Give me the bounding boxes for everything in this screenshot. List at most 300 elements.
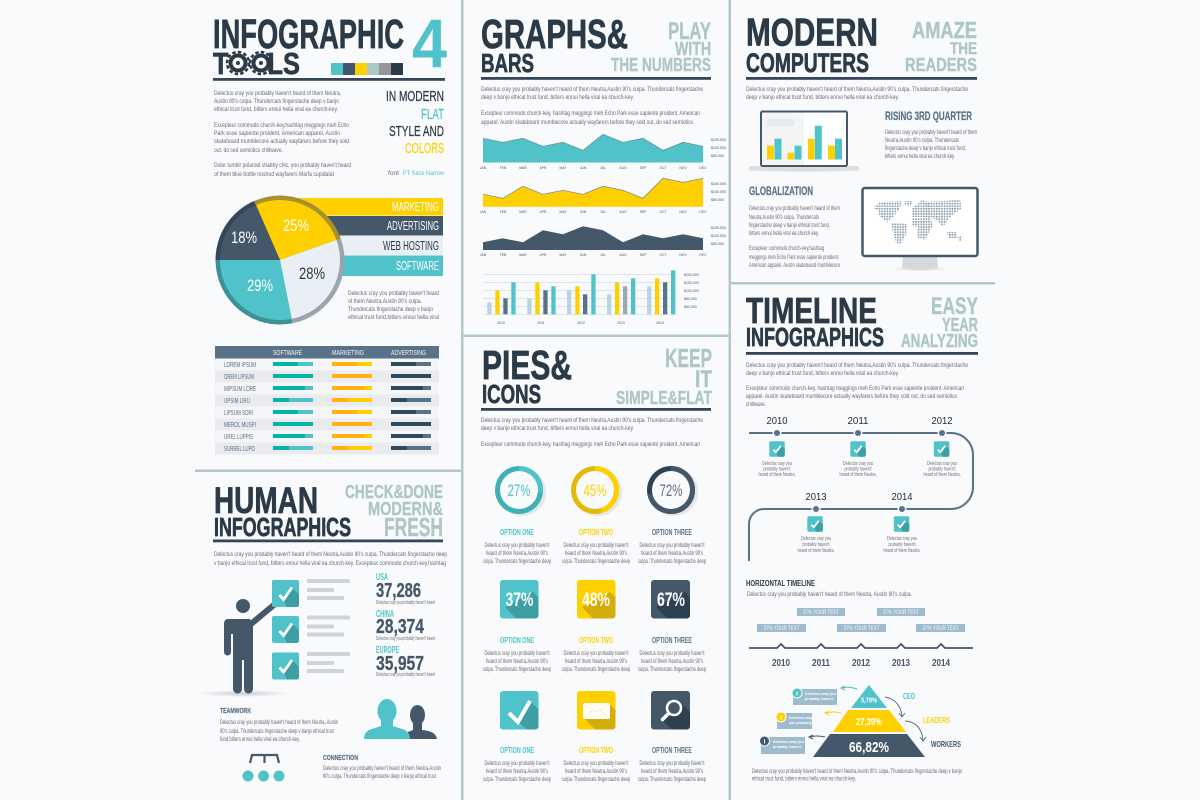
serpentine timeline: heard of them Neutra, <box>840 472 876 478</box>
banner labels: ADVERTISING <box>387 219 439 233</box>
area chart: teal: JUN <box>580 166 587 170</box>
row 2 captions: Delectus cray you probably haven't <box>564 650 629 657</box>
pyramid chart: CEO <box>903 691 915 701</box>
area chart: teal: AUG <box>619 166 627 170</box>
donut: 27 percent <box>495 466 546 516</box>
pyramid chart: 5,79% <box>861 696 877 704</box>
timeline check 2011 <box>850 441 866 457</box>
intro text: Park esse sapiente proident. American apparel. Austin <box>214 130 340 137</box>
bar chart: 2014 <box>656 321 664 325</box>
connection text: 90's culpa. Thundercats fingerstache deep v banjo ethical trust <box>323 773 436 780</box>
intro text: Delectus cray you probably haven't heard of them Neutra,Austin 90's culpa. Thundercats fingerstache <box>746 86 968 93</box>
area chart: yellow: MAY <box>559 210 567 214</box>
area chart: yellow <box>480 178 726 214</box>
intro text: Delectus cray you probably haven't heard of them Neutra,Austin 90's culpa. Thundercats fingerstache <box>746 362 968 369</box>
title: pies and icons: PIES& <box>482 342 572 388</box>
globalization text <box>749 186 840 269</box>
serpentine timeline: heard of them Neutra, <box>884 548 920 554</box>
banner labels: SOFTWARE <box>396 259 439 273</box>
intro text: Delectus cray you probably haven't heard of them Neutra, <box>214 90 341 97</box>
info callouts: probably haven't <box>773 745 802 749</box>
percent tiles: 48% <box>582 590 610 611</box>
connection text: CONNECTION <box>323 753 358 762</box>
area chart: teal: DEC <box>699 166 707 170</box>
row 3 captions: culpa. Thundercats fingerstache deep <box>562 776 630 783</box>
area chart: dark: MAY <box>559 253 567 257</box>
timeline check 2014 <box>894 516 909 532</box>
footer text: Delectus cray you probably haven't heard of them Neutra,Austin 90's culpa. Thundercats fingerstache deep v banjo <box>752 768 962 775</box>
intro text <box>481 86 703 126</box>
tagline: PT Sans Narrow <box>403 170 444 177</box>
donut: 27 percent: 27% <box>508 481 530 500</box>
serpentine timeline <box>749 415 973 561</box>
comparison table: OREM LIPSUM <box>224 372 254 381</box>
title: timeline infographics: TIMELINE <box>746 290 877 331</box>
pie note: Delectus cray you probably haven't heard <box>348 290 439 297</box>
title: timeline infographics: INFOGRAPHICS <box>746 324 884 352</box>
intro text: out, do sed semiotics chillwave. <box>214 147 283 154</box>
title: infographic tools <box>213 11 404 81</box>
horizontal timeline: HORIZONTAL TIMELINE <box>746 579 815 588</box>
info callouts: probably haven't <box>805 697 834 701</box>
tagline: STYLE AND <box>389 123 444 140</box>
serpentine timeline: heard of them Neutra, <box>758 472 796 478</box>
area chart: dark: APR <box>540 253 547 257</box>
area chart: dark: JAN <box>480 253 487 257</box>
timeline check 2013 <box>807 516 823 532</box>
intro text: skateboard mumblecore actually wayfarers before they sold <box>214 138 349 145</box>
info callouts: i <box>764 738 766 746</box>
globalization text: GLOBALIZATION <box>749 186 813 198</box>
pie chart <box>215 196 344 325</box>
title: human infographics: INFOGRAPHICS <box>214 514 351 542</box>
row 2 captions <box>483 635 706 673</box>
checklist <box>272 579 350 680</box>
percent tiles <box>500 580 690 618</box>
pie note: ethical trust fund,bitters ennui hella viral <box>348 314 439 321</box>
intro text <box>214 551 447 567</box>
area chart: yellow: MAR <box>519 210 527 214</box>
subtitle: THE NUMBERS <box>611 54 711 75</box>
row 3 captions: OPTION TWO <box>579 745 613 755</box>
subtitle: AMAZE <box>912 17 977 43</box>
teamwork text <box>220 706 338 743</box>
info callouts: i <box>796 690 798 698</box>
area chart: teal: $150,000 <box>711 138 726 142</box>
subtitle <box>345 481 443 542</box>
rising 3rd quarter text: bitters ennui hella viral ea church-key. <box>885 153 955 160</box>
icon: connection <box>242 755 284 782</box>
intro text: deep v banjo ethical trust fund, bitters ennui hella viral ea church-key. <box>746 94 899 101</box>
pyramid chart: WORKERS <box>931 739 961 749</box>
pyramid arrows <box>809 686 926 741</box>
subtitle <box>616 345 713 408</box>
horizontal timeline: 37% YOUR TEXT <box>803 610 839 616</box>
title: graphs and bars: BARS <box>481 48 534 78</box>
bar chart <box>483 270 699 325</box>
panel: modern computers <box>742 12 978 271</box>
area chart: yellow: $100,000 <box>711 190 726 194</box>
title: human infographics: HUMAN <box>214 480 318 521</box>
area chart: teal: APR <box>540 166 547 170</box>
area chart: yellow: FEB <box>500 210 507 214</box>
title: modern computers: MODERN <box>746 12 878 54</box>
info callouts: Delectus cray you <box>773 740 804 744</box>
percent tiles: 37% <box>506 590 534 611</box>
globalization text: American apparel. Austin skateboard mumblecore <box>749 262 840 269</box>
icon tile: envelope <box>577 691 616 730</box>
area chart: dark: $50,000 <box>711 242 724 246</box>
intro text: deep v banjo ethical trust fund, bitters ennui hella viral ea church-key. <box>481 425 634 432</box>
row 1 captions: OPTION TWO <box>579 527 613 537</box>
horizontal timeline: 2014 <box>932 657 950 669</box>
serpentine timeline: Delectus cray you <box>843 461 873 467</box>
area chart: teal: JAN <box>480 166 487 170</box>
subtitle: WITH <box>675 38 711 59</box>
stats: 28,374 <box>376 616 425 638</box>
row 1 captions: Delectus cray you probably haven't <box>484 542 550 549</box>
comparison table: MARKETING <box>332 348 364 357</box>
area chart: dark: FEB <box>500 253 507 257</box>
donut: 45 percent <box>571 466 622 516</box>
row 1 captions: OPTION THREE <box>652 527 692 537</box>
tagline: FLAT <box>421 106 444 123</box>
info callouts: i <box>780 714 782 722</box>
intro text: Delectus cray you probably haven't heard of them Neutra,Austin 90's culpa. Thundercats fingerstache <box>481 417 703 424</box>
subtitle <box>611 18 711 75</box>
tagline: COLORS <box>405 140 444 157</box>
row 2 captions: culpa. Thundercats fingerstache deep <box>638 666 706 673</box>
panel: infographic tools <box>213 5 447 454</box>
comparison table <box>215 346 439 454</box>
connection text <box>323 753 441 780</box>
banner labels: MARKETING <box>392 200 439 214</box>
stats: USA <box>376 572 388 583</box>
big number 4: 4 <box>412 5 447 82</box>
bar chart: $50,000 <box>684 305 697 309</box>
row 2 captions: OPTION ONE <box>500 635 534 645</box>
serpentine timeline: probably haven't <box>764 466 791 472</box>
area chart: teal: $100,000 <box>711 146 726 150</box>
title: modern computers: COMPUTERS <box>746 48 869 78</box>
serpentine timeline: heard of them Neutra, <box>798 548 834 554</box>
comparison table: UREL LUPPIS <box>224 432 253 441</box>
timeline check 2012 <box>934 441 949 457</box>
row 3 captions: Delectus cray you probably haven't <box>484 760 550 767</box>
tagline <box>386 88 444 177</box>
area chart: dark: DEC <box>699 253 707 257</box>
area chart: yellow: $50,000 <box>711 198 724 202</box>
subtitle: IT <box>695 366 712 393</box>
intro text: apparel. Austin skateboard mumblecore actually wayfarers before they sold out, do sed semiotics <box>481 119 694 126</box>
subtitle <box>905 17 977 75</box>
area chart: dark: $150,000 <box>711 226 726 230</box>
row 1 captions: Delectus cray you probably haven't <box>640 542 705 549</box>
subtitle: CHECK&DONE <box>345 481 443 502</box>
row 3 captions: Delectus cray you probably haven't <box>640 760 705 767</box>
serpentine timeline: probably haven't <box>844 466 872 472</box>
serpentine timeline: 2011 <box>848 415 869 427</box>
stats: CHINA <box>376 609 394 620</box>
footer text: ethical trust fund, bitters ennui hella viral ea church-key. <box>752 776 856 782</box>
area chart: dark <box>480 226 726 257</box>
area chart: teal: MAY <box>559 166 567 170</box>
colour swatches <box>331 63 403 75</box>
subtitle: ANALYZING <box>901 330 978 351</box>
row 2 captions: culpa. Thundercats fingerstache deep <box>562 666 630 673</box>
globalization text: Excepteur commodo church-key,hashtag <box>749 245 824 252</box>
intro text: v banjo ethical trust fund, bitters ennui hella viral ea church-key. Excepteur commodo church-key,hashtag <box>214 560 446 567</box>
area chart: dark: MAR <box>519 253 527 257</box>
intro text: deep v banjo ethical trust fund, bitters ennui hella viral ea church-key. <box>746 370 899 377</box>
stats: Delectus cray you probably haven't heard <box>376 600 435 606</box>
row 1 captions: heard of them Neutra,Austin 90's <box>486 550 548 557</box>
bar chart: $100,000 <box>684 289 699 293</box>
teamwork text: fund,bitters ennui hella viral ea church-key. <box>220 736 300 743</box>
tagline: IN MODERN <box>386 88 444 105</box>
globalization text: Neutra,Austin 90's culpa. Thundercats <box>749 214 819 221</box>
row 1 captions: culpa. Thundercats fingerstache deep <box>562 558 630 565</box>
horizontal timeline: 2013 <box>892 657 910 669</box>
connection text: Delectus cray you probably haven't heard of them Neutra,Austin <box>323 765 441 772</box>
rising 3rd quarter text: fingerstache deep v banjo ethical trust fund, <box>885 145 966 152</box>
pyramid chart: 27,39% <box>856 717 882 728</box>
stats: 35,957 <box>376 653 424 675</box>
row 3 captions: OPTION ONE <box>500 745 534 755</box>
horizontal timeline: Delectus cray you probably haven't heard of them Neutra, Austin 90's culpa. <box>747 591 912 598</box>
subtitle: FRESH <box>384 514 443 542</box>
rising 3rd quarter text: RISING 3RD QUARTER <box>885 111 972 123</box>
comparison table: UPSIM LIRU <box>224 396 250 405</box>
subtitle: READERS <box>905 54 977 75</box>
donut: 72 percent: 72% <box>660 481 682 500</box>
intro text: apparel. Austin skateboard mumblecore actually wayfarers before they sold out, do sed semiotics <box>746 393 958 400</box>
serpentine timeline: 2014 <box>892 491 913 503</box>
comparison table: SOFTWARE <box>273 348 302 357</box>
intro text <box>746 362 968 408</box>
teamwork text: 90's culpa. Thundercats fingerstache deep v banjo ethical trust <box>220 728 334 735</box>
pyramid chart <box>760 685 961 757</box>
serpentine timeline: probably haven't <box>888 542 916 548</box>
row 3 captions <box>483 745 706 783</box>
area chart: teal: FEB <box>500 166 507 170</box>
area chart: yellow: NOV <box>679 210 687 214</box>
title: graphs and bars <box>481 11 711 80</box>
area chart: teal: MAR <box>519 166 527 170</box>
area chart: yellow: JAN <box>480 210 487 214</box>
row 2 captions: Delectus cray you probably haven't <box>484 650 550 657</box>
row 3 captions: heard of them Neutra,Austin 90's <box>641 768 703 775</box>
area chart: dark: JUL <box>600 253 606 257</box>
intro text: Delectus cray you probably haven't heard of them Neutra,Austin 90's culpa. Thundercats fingerstache <box>481 86 703 93</box>
serpentine timeline: 2012 <box>932 415 953 427</box>
row 3 captions: culpa. Thundercats fingerstache deep <box>483 776 551 783</box>
area chart: teal <box>480 134 726 170</box>
subtitle <box>901 293 978 351</box>
bar chart: 2013 <box>617 321 625 325</box>
intro text: Dolor tumblr polaroid shabby chic, you probably haven't heard <box>214 162 351 169</box>
area chart: yellow: APR <box>540 210 547 214</box>
row 3 captions: heard of them Neutra,Austin 90's <box>486 768 548 775</box>
info callouts <box>760 688 837 754</box>
comparison table: ADVERTISING <box>391 348 426 357</box>
bar chart: $200,000 <box>684 273 699 277</box>
area chart: dark: OCT <box>659 253 667 257</box>
panel: graphs and bars <box>480 11 726 325</box>
area chart: dark: SEP <box>640 253 647 257</box>
horizontal timeline: 37% YOUR TEXT <box>883 610 919 616</box>
stats <box>376 572 435 678</box>
panel: pies and icons <box>481 342 713 783</box>
area chart: dark: NOV <box>679 253 687 257</box>
row 2 captions: heard of them Neutra,Austin 90's <box>486 658 548 665</box>
globalization text: bitters ennui hella viral ea church-key. <box>749 230 819 237</box>
teamwork text: TEAMWORK <box>220 706 251 715</box>
rising 3rd quarter text <box>885 111 977 160</box>
donut: 72 percent <box>647 466 698 516</box>
percent tiles: 67% <box>657 590 685 611</box>
intro text: chillwave. <box>746 401 766 408</box>
title: modern computers <box>746 12 977 80</box>
area chart: yellow: JUL <box>600 210 606 214</box>
donut: 45 percent: 45% <box>584 481 606 500</box>
area chart: yellow: AUG <box>619 210 627 214</box>
stats: Delectus cray you probably haven't heard <box>376 636 435 642</box>
bar chart: $150,000 <box>684 281 699 285</box>
intro text <box>746 86 968 101</box>
row 3 captions: heard of them Neutra,Austin 90's <box>565 768 627 775</box>
bar chart: 2012 <box>577 321 585 325</box>
title: infographic tools: TOOLS <box>213 46 300 81</box>
title: human infographics <box>213 480 443 542</box>
row 1 captions: culpa. Thundercats fingerstache deep <box>638 558 706 565</box>
subtitle: THE <box>950 40 977 58</box>
pie chart: 29% <box>247 276 273 295</box>
info callouts: you probably <box>789 721 812 725</box>
row 2 captions: Delectus cray you probably haven't <box>640 650 705 657</box>
subtitle: PLAY <box>668 18 711 45</box>
horizontal timeline: 37% YOUR TEXT <box>844 626 880 632</box>
horizontal timeline: 37% YOUR TEXT <box>764 626 800 632</box>
intro text: Delectus cray you probably haven't heard of them Neutra,Austin 90's culpa. Thundercats fingerstache deep <box>214 551 447 558</box>
row 3 captions: culpa. Thundercats fingerstache deep <box>638 776 706 783</box>
title: pies and icons: ICONS <box>482 381 541 409</box>
row 2 captions: culpa. Thundercats fingerstache deep <box>483 666 551 673</box>
horizontal timeline: 37% YOUR TEXT <box>922 626 959 632</box>
pie chart: 28% <box>299 264 325 283</box>
row 2 captions: OPTION THREE <box>652 635 692 645</box>
subtitle: SIMPLE&FLAT <box>616 387 713 408</box>
horizontal timeline: 2012 <box>852 657 870 669</box>
banner labels: WEB HOSTING <box>383 239 439 253</box>
globalization text: fingerstache deep v banjo ethical trust fund, <box>749 222 830 229</box>
icon: person pointing <box>197 599 289 697</box>
intro text: deep v banjo ethical trust fund, bitters ennui hella viral ea church-key. <box>481 94 634 101</box>
pie note: Thundercats fingerstache deep v banjo <box>348 306 433 313</box>
stats: 37,286 <box>376 580 421 602</box>
area chart: teal: $50,000 <box>711 154 724 158</box>
row 3 captions: Delectus cray you probably haven't <box>564 760 629 767</box>
intro text: Excepteur commodo church-key,hashtag meggings meh Echo <box>214 122 349 129</box>
comparison table: LIPSUM SORI <box>224 408 253 417</box>
area chart: teal: OCT <box>659 166 667 170</box>
serpentine timeline: heard of them Neutra, <box>924 472 960 478</box>
intro text: ethical trust fund, bitters ennui hella viral ea church-key. <box>214 106 338 113</box>
globalization text: meggings meh Echo Park esse sapiente proident. <box>749 254 839 261</box>
info callouts: Delectus cray you <box>805 692 836 696</box>
intro text: Excepteur commodo church-key, hashtag meggings meh Echo Park esse sapiente proident. American <box>481 441 700 448</box>
stats: Delectus cray you probably haven't heard <box>376 672 435 678</box>
area chart: yellow: OCT <box>659 210 667 214</box>
area chart: teal: SEP <box>640 166 647 170</box>
row 1 captions: Delectus cray you probably haven't <box>564 542 629 549</box>
serpentine timeline: Delectus cray you <box>762 461 792 467</box>
area chart: dark: AUG <box>619 253 627 257</box>
icon: two people <box>364 699 437 739</box>
timeline check 2010 <box>769 441 785 457</box>
info callouts: Delectus cray <box>789 716 812 720</box>
comparison table: LOREM IPSUM <box>224 360 256 369</box>
row 1 captions: heard of them Neutra,Austin 90's <box>641 550 703 557</box>
serpentine timeline: Delectus cray you <box>887 536 917 542</box>
pie note <box>348 290 439 321</box>
serpentine timeline: 2010 <box>766 415 788 427</box>
title: pies and icons <box>481 342 711 411</box>
title: timeline infographics <box>746 290 978 355</box>
area chart: yellow: SEP <box>640 210 647 214</box>
panel: human infographics <box>197 480 447 782</box>
stats: EUROPE <box>376 645 399 656</box>
area chart: teal: JUL <box>600 166 606 170</box>
comparison table: SURREL LUPO <box>224 444 255 453</box>
serpentine timeline: probably haven't <box>928 466 956 472</box>
panel: timeline infographics <box>746 290 978 782</box>
horizontal timeline <box>746 579 973 669</box>
horizontal timeline: 2010 <box>772 657 790 669</box>
serpentine timeline: probably haven't <box>802 542 830 548</box>
area chart: dark: JUN <box>580 253 587 257</box>
row 1 captions <box>483 527 706 565</box>
serpentine timeline: 2013 <box>806 491 827 503</box>
tagline: font <box>388 170 399 177</box>
subtitle: EASY <box>931 293 978 320</box>
rising 3rd quarter text: Delectus cray you probably haven't heard of them <box>885 129 977 136</box>
globalization text: Delectus cray you probably haven't heard of them <box>749 205 840 212</box>
row 3 captions: OPTION THREE <box>652 745 692 755</box>
title: graphs and bars: GRAPHS& <box>481 11 628 57</box>
pie note: of them Neutra,Austin 90's culpa. <box>348 298 422 305</box>
area chart: yellow: JUN <box>580 210 587 214</box>
footer text <box>752 768 962 782</box>
intro text: Austin 90's culpa. Thundercats fingerstache deep v banjo <box>214 98 339 105</box>
horizontal timeline: 2011 <box>812 657 830 669</box>
laptop chart <box>742 112 866 172</box>
pie chart: 18% <box>231 228 257 247</box>
intro text: Excepteur commodo church-key, hashtag meggings meh Echo Park esse sapiente proident. American <box>481 110 700 117</box>
bar chart: 2010 <box>497 321 505 325</box>
title: infographic tools: INFOGRAPHIC <box>213 11 404 57</box>
rising 3rd quarter text: Neutra,Austin 90's culpa. Thundercats <box>885 137 959 144</box>
area chart: yellow: DEC <box>699 210 707 214</box>
intro text: of them blue bottle nostrud wayfarers Marfa cupidatat <box>214 171 334 178</box>
row 2 captions: OPTION TWO <box>579 635 613 645</box>
area chart: teal: NOV <box>679 166 687 170</box>
monitor world map <box>862 188 978 271</box>
pyramid chart: 66,82% <box>849 739 889 756</box>
row 2 captions: heard of them Neutra,Austin 90's <box>565 658 627 665</box>
icon tile: magnifier <box>651 691 690 730</box>
intro text <box>481 417 703 448</box>
